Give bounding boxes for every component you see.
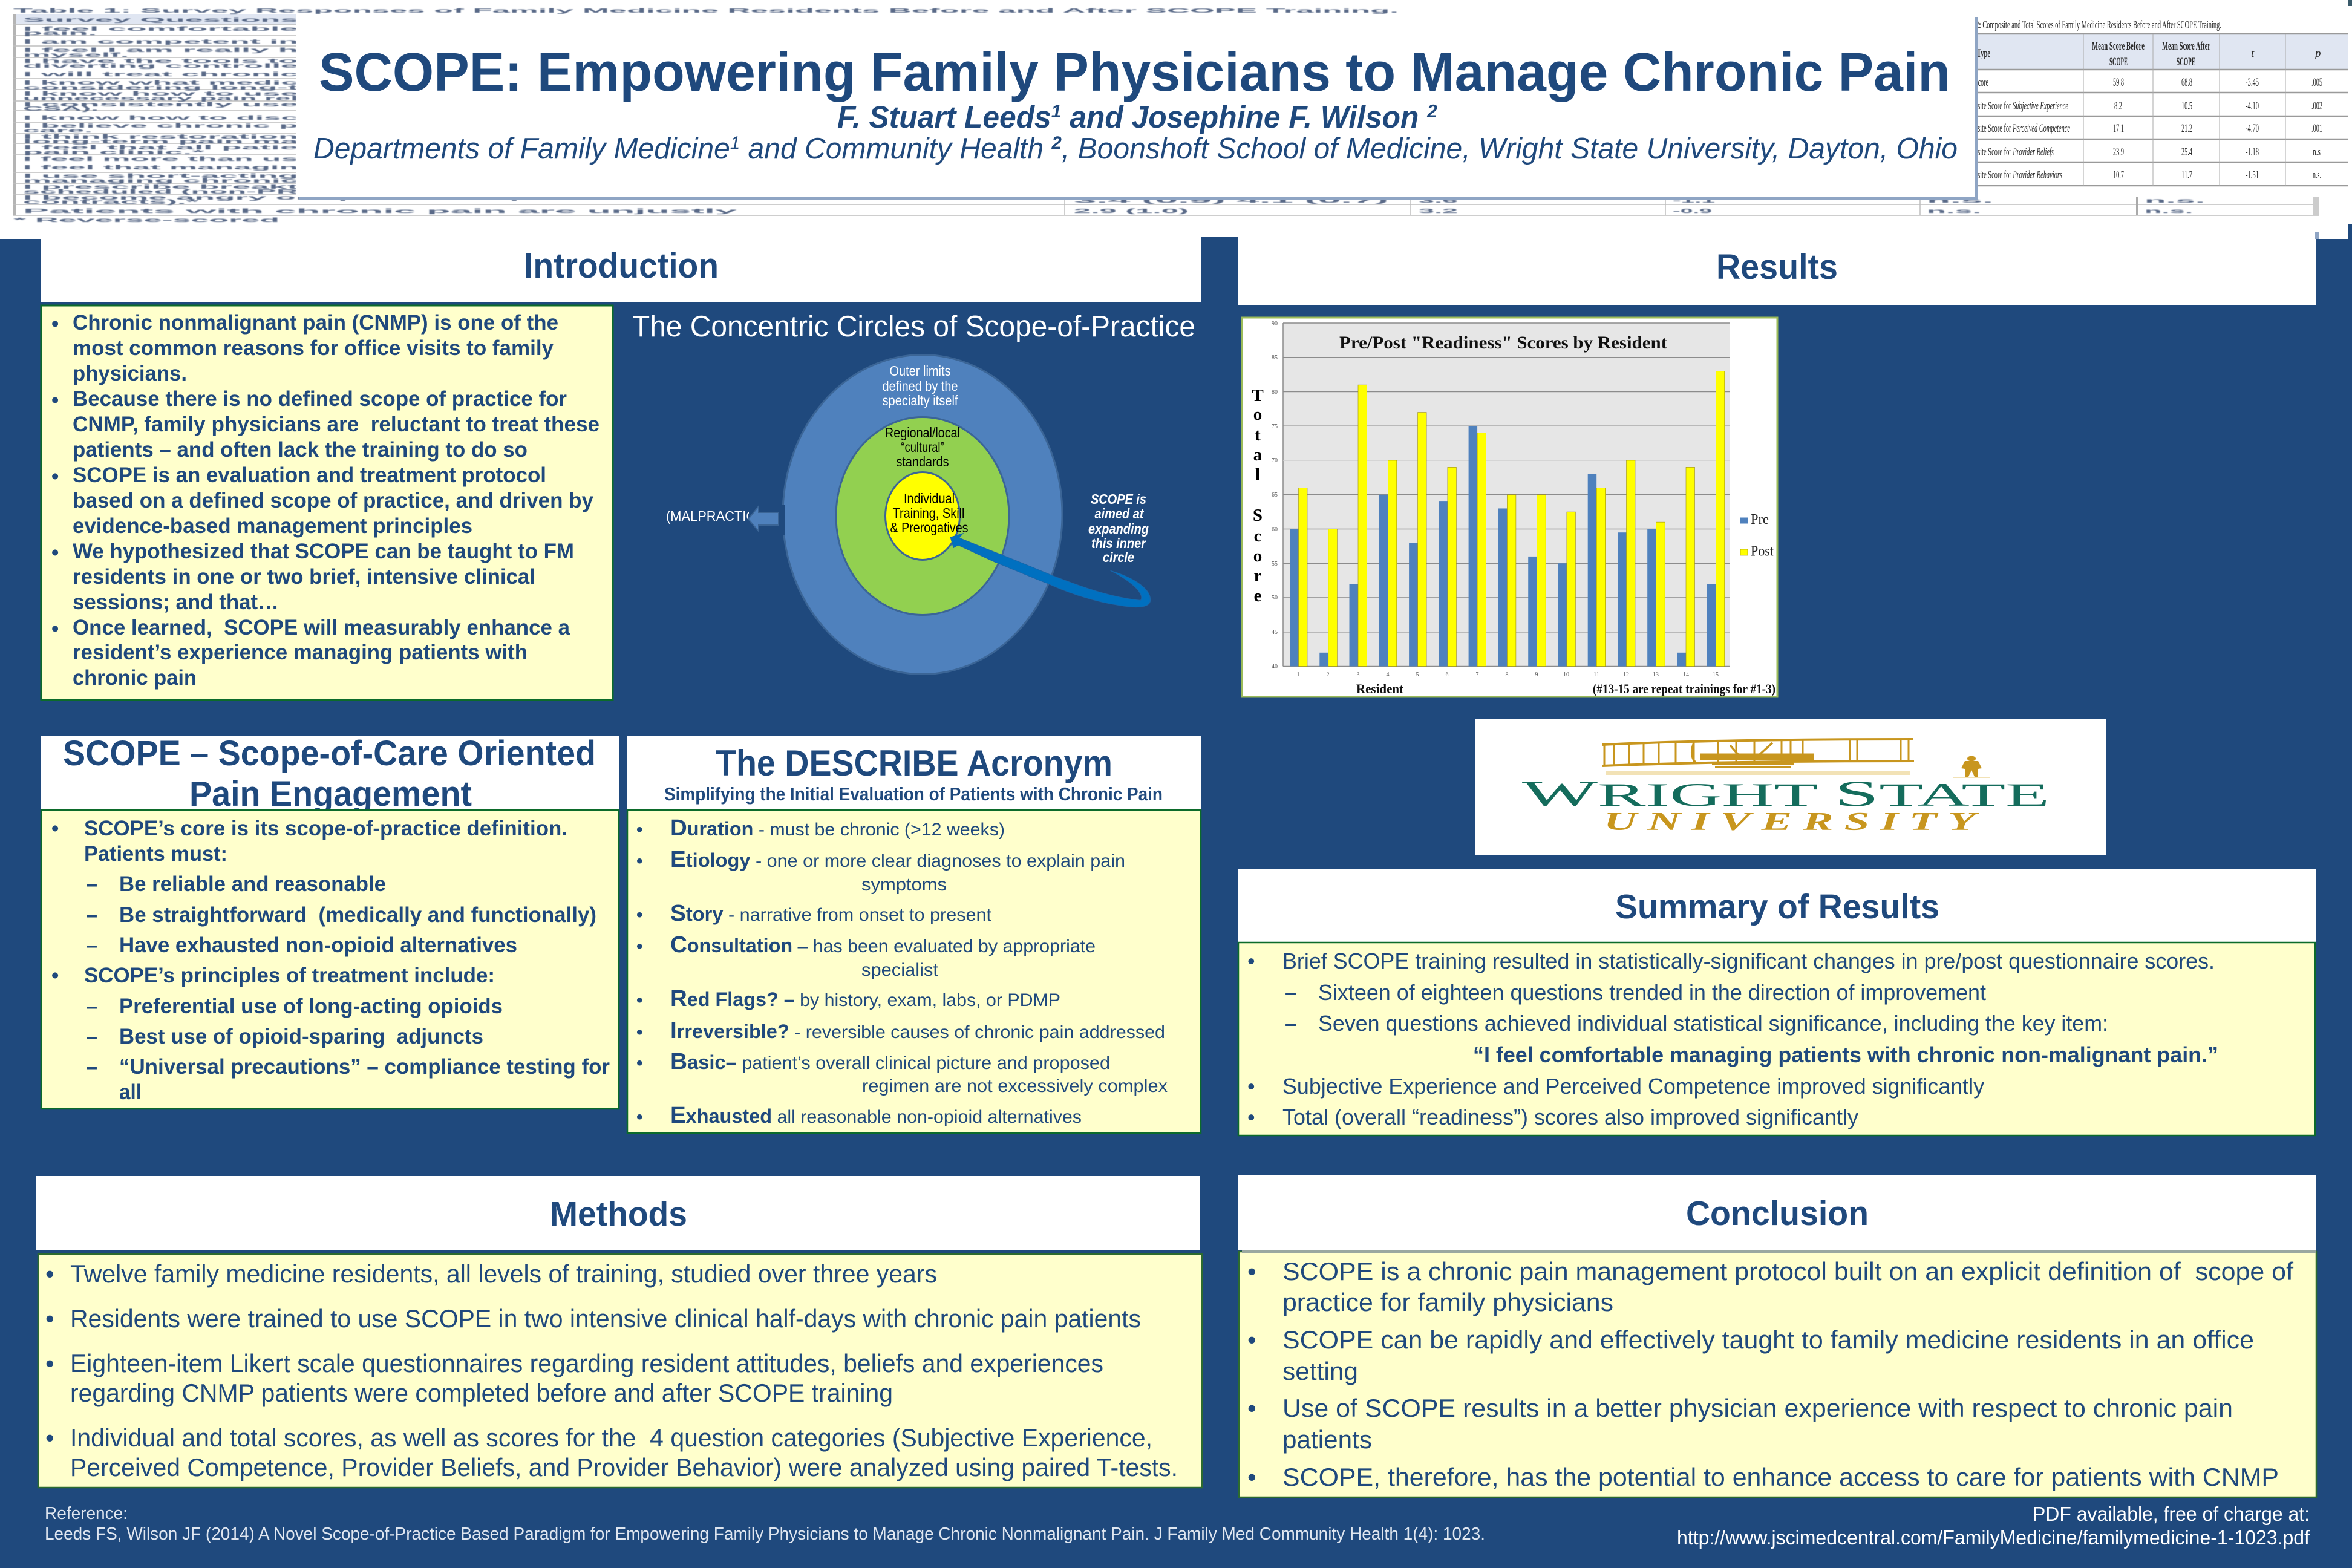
heading: Conclusion xyxy=(1238,1175,2316,1250)
introduction bullets xyxy=(41,305,613,700)
legend: Post xyxy=(1751,543,1774,559)
DESCRIBE list: • xyxy=(636,1107,643,1127)
outer circle: specialty itself xyxy=(882,393,958,408)
table 2 header row: p xyxy=(2314,47,2321,60)
background table 1: survey responses: 2.9 (1.0) xyxy=(1074,208,1189,215)
DESCRIBE list: Exhausted all reasonable non-opioid alternatives xyxy=(670,1103,1082,1128)
SCOPE bullets: • xyxy=(51,964,59,987)
panel: Introduction xyxy=(41,239,1201,700)
background table 1: survey responses: -1.1 xyxy=(1673,198,1716,204)
background table 1: survey responses: Survey Questions xyxy=(23,17,299,24)
title: SCOPE: Empowering Family Physicians to Manage Chronic Pain xyxy=(319,42,1950,103)
background table 1: survey responses: * Reverse-scored xyxy=(13,217,279,224)
SCOPE bullets: • xyxy=(51,817,59,840)
background table 1: survey responses: 3.2 xyxy=(1419,208,1459,215)
introduction bullets: Chronic nonmalignant pain (CNMP) is one of the xyxy=(73,311,558,335)
background table 1: survey responses: Table 1: Survey Responses of Family Medicine Residents Before and After SCOPE Training. xyxy=(13,8,1399,15)
SCOPE bullets: – xyxy=(86,872,97,896)
x axis scale: 11 xyxy=(1593,671,1599,678)
heading: DESCRIBE xyxy=(627,736,1201,809)
middle circle: Regional/local xyxy=(885,425,960,440)
summary bullets: Subjective Experience and Perceived Competence improved significantly xyxy=(1282,1074,1984,1099)
outer circle: defined by the xyxy=(882,378,958,394)
outer circle xyxy=(783,354,1062,674)
SCOPE bullets: Best use of opioid-sparing adjuncts xyxy=(119,1025,483,1048)
x axis scale: 5 xyxy=(1416,671,1419,678)
heading: Methods: Methods xyxy=(550,1195,687,1233)
background table 1: survey responses: 3.6 xyxy=(1419,198,1459,204)
DESCRIBE list: specialist xyxy=(861,960,939,980)
background table 1: survey responses: I consistently use xyxy=(23,102,299,108)
panel: Summary of Results xyxy=(1238,869,2316,1135)
background table 1: survey responses: Patients with chronic pain are unjustly xyxy=(23,208,739,215)
DESCRIBE list: Story - narrative from onset to present xyxy=(670,901,992,926)
y axis title: a xyxy=(1253,445,1263,465)
heading: SCOPE: Pain Engagement xyxy=(189,774,472,814)
DESCRIBE list: • xyxy=(636,1053,643,1073)
SCOPE callout: this inner xyxy=(1091,535,1146,551)
conclusion bullets: • xyxy=(1247,1394,1256,1422)
table 2 data rows xyxy=(1975,76,2322,181)
legend xyxy=(1740,512,1774,559)
diagram title: The Concentric Circles of Scope-of-Practice xyxy=(632,310,1195,343)
icon: Wright flyer xyxy=(1602,739,1914,767)
legend: Pre xyxy=(1751,512,1769,528)
footer: PDF link: PDF available, free of charge at: xyxy=(2033,1503,2310,1525)
background table 1: survey responses xyxy=(13,8,2319,224)
table 2 data rows: 25.4 xyxy=(2181,146,2192,158)
introduction bullets: residents in one or two brief, intensive clinical xyxy=(73,565,535,589)
DESCRIBE list: • xyxy=(636,1022,643,1042)
table 2 data rows: 17.1 xyxy=(2113,122,2124,135)
authors: and Josephine F. Wilson xyxy=(1062,100,1427,134)
conclusion bullets xyxy=(1239,1250,2316,1497)
summary bullets: • xyxy=(1247,1074,1255,1099)
x axis scale: 8 xyxy=(1505,671,1509,678)
DESCRIBE list: Red Flags? – by history, exam, labs, or PDMP xyxy=(670,986,1060,1011)
SCOPE callout: expanding xyxy=(1088,521,1149,537)
DESCRIBE list: Basic– patient’s overall clinical picture and proposed xyxy=(670,1049,1110,1074)
table 2 data rows: n.s xyxy=(2313,146,2321,158)
background table 1: survey responses: myself. xyxy=(23,52,129,59)
x axis scale: 3 xyxy=(1356,671,1360,678)
DESCRIBE list: • xyxy=(636,820,643,840)
middle circle xyxy=(836,417,1009,615)
summary bullets: “I feel comfortable managing patients with chronic non-malignant pain.” xyxy=(1473,1042,2218,1067)
conclusion bullets: SCOPE is a chronic pain management protocol built on an explicit definition of scope of xyxy=(1282,1257,2293,1285)
icon: standing figure xyxy=(1953,756,1990,778)
background table 2: composite and total scores xyxy=(1972,19,2348,186)
y axis title: r xyxy=(1254,566,1262,586)
introduction bullets: We hypothesized that SCOPE can be taught to FM xyxy=(73,540,574,563)
background table 1: survey responses: I think restoration xyxy=(23,134,298,140)
SCOPE bullets: Patients must: xyxy=(84,842,227,866)
table 2 data rows: 21.2 xyxy=(2181,122,2192,135)
authors: F. Stuart Leeds xyxy=(837,100,1057,134)
methods bullets xyxy=(38,1254,1202,1488)
DESCRIBE list: Duration - must be chronic (>12 weeks) xyxy=(670,815,1005,841)
panel: DESCRIBE acronym xyxy=(627,736,1201,1133)
conclusion bullets: SCOPE can be rapidly and effectively taught to family medicine residents in an office xyxy=(1282,1325,2254,1354)
summary bullets xyxy=(1238,942,2315,1135)
y axis scale: 40 xyxy=(1272,664,1278,670)
table 2 data rows: 59.8 xyxy=(2113,76,2124,89)
y axis scale: 65 xyxy=(1272,492,1278,498)
background table 1: survey responses: I prescribe breakt xyxy=(23,184,301,191)
table 2 data rows: -3.45 xyxy=(2246,76,2259,89)
curved arrow xyxy=(950,534,1150,607)
heading: SCOPE: SCOPE – Scope-of-Care Oriented xyxy=(63,734,596,773)
footer: PDF link xyxy=(1677,1503,2310,1549)
conclusion bullets: setting xyxy=(1282,1357,1358,1385)
methods bullets: • xyxy=(45,1259,54,1288)
DESCRIBE list: Consultation – has been evaluated by appropriate xyxy=(670,932,1096,958)
table 2 data rows: .002 xyxy=(2311,100,2322,113)
background table 1: survey responses: I become angry or upset when patients violate their contracts xyxy=(23,195,992,201)
SCOPE bullets: Preferential use of long-acting opioids xyxy=(119,995,503,1018)
introduction bullets: Because there is no defined scope of practice for xyxy=(73,387,567,411)
x axis scale: 1 xyxy=(1297,671,1299,678)
affiliations: Departments of Family Medicine xyxy=(313,132,739,165)
table 2 data rows: Score xyxy=(1975,76,1988,89)
SCOPE callout xyxy=(1088,491,1149,565)
SCOPE callout: circle xyxy=(1103,549,1134,565)
bar chart: pre/post readiness scores xyxy=(1242,318,1777,697)
y axis title: t xyxy=(1255,425,1261,445)
introduction bullets: chronic pain xyxy=(73,666,197,690)
introduction bullets: Once learned, SCOPE will measurably enhance a xyxy=(73,616,570,639)
x axis scale: 4 xyxy=(1387,671,1389,678)
background table 1: survey responses: CSA). xyxy=(23,106,99,113)
affiliations: 2 xyxy=(1051,133,1062,153)
conclusion bullets: • xyxy=(1247,1463,1256,1491)
heading: Summary of Results: Summary of Results xyxy=(1615,887,1939,926)
affiliations: and Community Health xyxy=(740,132,1052,165)
panel: Methods xyxy=(36,1176,1202,1488)
SCOPE bullets: – xyxy=(86,933,97,957)
summary bullets: – xyxy=(1285,1011,1297,1036)
y axis scale xyxy=(1272,321,1278,670)
background table 1: survey responses: pain. xyxy=(23,30,97,37)
table 2 header row: t xyxy=(2251,47,2255,60)
methods bullets: • xyxy=(45,1349,54,1377)
inner circle: Training, Skill xyxy=(893,505,964,521)
logo: Wright State University xyxy=(1475,719,2106,855)
conclusion bullets: patients xyxy=(1282,1425,1372,1454)
SCOPE bullets: – xyxy=(86,903,97,927)
introduction bullets: most common reasons for office visits to family xyxy=(73,336,554,360)
y axis scale: 85 xyxy=(1272,354,1278,361)
background table 1: survey responses: I know what medic xyxy=(23,80,299,87)
table 2 data rows: osite Score for Subjective Experience xyxy=(1975,100,2068,113)
background table 1: survey responses: care. xyxy=(23,128,93,134)
affiliations: 1 xyxy=(730,133,740,153)
background table 1: survey responses: pain clinic.* xyxy=(23,149,205,156)
heading: Results xyxy=(1238,239,2316,305)
background table 1: survey responses: diverting controlle xyxy=(23,63,299,70)
y axis scale: 70 xyxy=(1272,457,1278,464)
summary bullets: – xyxy=(1285,980,1297,1005)
background table 1: survey responses: n.s. xyxy=(1927,198,1994,204)
table 2 data rows: 68.8 xyxy=(2181,76,2192,89)
conclusion bullets: SCOPE, therefore, has the potential to enhance access to care for patients with CNMP xyxy=(1282,1463,2279,1491)
background table 1: survey responses: 3.4 (0.9) 4.1 (0.7) xyxy=(1074,198,1388,204)
DESCRIBE list xyxy=(627,810,1201,1133)
x axis title: Resident xyxy=(1356,681,1404,696)
background table 1: survey responses: I know how to disc xyxy=(23,115,299,122)
SCOPE callout: SCOPE is xyxy=(1091,491,1146,507)
DESCRIBE list: • xyxy=(636,936,643,956)
panel: Conclusion xyxy=(1238,1175,2316,1497)
x axis scale: 10 xyxy=(1563,671,1569,678)
heading: SCOPE xyxy=(41,734,619,814)
heading: Introduction xyxy=(41,239,1201,302)
table 2 data rows: -4.70 xyxy=(2246,122,2259,135)
background table 1: survey responses: I have the tools to xyxy=(23,58,298,65)
DESCRIBE list: regimen are not excessively complex xyxy=(862,1076,1168,1096)
DESCRIBE list: symptoms xyxy=(861,875,947,895)
background table 1: survey responses: managing chronic xyxy=(23,178,299,185)
summary bullets: • xyxy=(1247,949,1255,973)
SCOPE bullets: Have exhausted non-opioid alternatives xyxy=(119,933,517,957)
SCOPE bullets: SCOPE’s principles of treatment include: xyxy=(84,964,495,987)
table 2 data rows: .005 xyxy=(2311,76,2322,89)
methods bullets: • xyxy=(45,1304,54,1333)
table 2 data rows: .001 xyxy=(2311,122,2322,135)
SCOPE bullets: – xyxy=(86,1025,97,1048)
heading: Introduction: Introduction xyxy=(524,246,719,286)
x axis scale xyxy=(1297,671,1719,678)
table 2 data rows: osite Score for Provider Beliefs xyxy=(1975,146,2054,158)
methods bullets: Residents were trained to use SCOPE in two intensive clinical half-days with chronic pain patients xyxy=(70,1304,1141,1333)
y axis title: e xyxy=(1254,586,1262,606)
summary bullets: • xyxy=(1247,1105,1255,1129)
heading: DESCRIBE: Simplifying the Initial Evaluation of Patients with Chronic Pain xyxy=(664,783,1163,805)
background table 1: survey responses: I feel comfortable xyxy=(23,26,299,33)
methods bullets: Perceived Competence, Provider Beliefs, and Provider Behavior) were analyzed using paired T-tests. xyxy=(70,1453,1178,1481)
y axis title: S xyxy=(1253,506,1263,525)
x axis scale: 13 xyxy=(1653,671,1659,678)
background table 1: survey responses: n.s. xyxy=(2145,198,2206,204)
table 2 header row: Mean Score Before xyxy=(2092,40,2145,53)
introduction bullets: • xyxy=(51,312,59,336)
conclusion bullets: • xyxy=(1247,1325,1256,1354)
summary bullets: Brief SCOPE training resulted in statistically-significant changes in pre/post questionnaire scores. xyxy=(1282,949,2215,973)
x axis scale: 14 xyxy=(1683,671,1689,678)
inner circle: Individual xyxy=(904,491,955,506)
table 2 data rows: 23.9 xyxy=(2113,146,2124,158)
SCOPE callout: aimed at xyxy=(1095,506,1145,521)
footer: reference xyxy=(45,1504,1485,1544)
diagram: concentric circles of scope-of-practice xyxy=(632,310,1195,674)
DESCRIBE list: • xyxy=(636,990,643,1010)
icon: flyer ground shadow xyxy=(1606,771,1910,775)
DESCRIBE list: Etiology - one or more clear diagnoses to explain pain xyxy=(670,847,1125,872)
pre bars xyxy=(1290,426,1716,667)
background table 1: survey responses: long-term pain ma xyxy=(23,139,299,145)
inner circle xyxy=(886,472,968,560)
background table 1: survey responses: -0.9 xyxy=(1673,208,1713,215)
SCOPE bullets xyxy=(41,810,619,1109)
x axis scale: 9 xyxy=(1535,671,1538,678)
table 2 data rows: osite Score for Provider Behaviors xyxy=(1975,169,2062,181)
SCOPE bullets: “Universal precautions” – compliance testing for xyxy=(119,1055,610,1079)
y axis scale: 55 xyxy=(1272,561,1278,567)
introduction bullets: evidence-based management principles xyxy=(73,514,472,538)
introduction bullets: CNMP, family physicians are reluctant to treat these xyxy=(73,413,599,436)
summary bullets: Total (overall “readiness”) scores also improved significantly xyxy=(1282,1105,1858,1129)
introduction bullets: based on a defined scope of practice, and driven by xyxy=(73,489,594,512)
background table 1: survey responses: unnecessary pain rel xyxy=(23,96,299,102)
methods bullets: Eighteen-item Likert scale questionnaires regarding resident attitudes, beliefs and experiences xyxy=(70,1349,1103,1377)
footer: reference: Reference: xyxy=(45,1504,128,1523)
methods bullets: • xyxy=(45,1423,54,1452)
SCOPE bullets: – xyxy=(86,1055,97,1079)
y axis title: o xyxy=(1253,546,1262,566)
table 2 data rows: -4.10 xyxy=(2246,100,2259,113)
SCOPE bullets: SCOPE’s core is its scope-of-practice definition. xyxy=(84,817,567,840)
y axis scale: 75 xyxy=(1272,423,1278,430)
introduction bullets: sessions; and that… xyxy=(73,590,279,614)
chart title: Pre/Post "Readiness" Scores by Resident xyxy=(1339,333,1667,353)
SCOPE bullets: Be straightforward (medically and functionally) xyxy=(119,903,596,927)
y axis scale: 60 xyxy=(1272,526,1278,533)
malpractice label and arrow: (MALPRACTICE) xyxy=(666,508,769,524)
introduction bullets: patients – and often lack the training to do so xyxy=(73,438,528,462)
table 2 data rows: -1.18 xyxy=(2246,146,2259,158)
heading: Methods xyxy=(36,1176,1200,1250)
x axis scale: 6 xyxy=(1446,671,1448,678)
y axis scale: 90 xyxy=(1272,321,1278,327)
introduction bullets: • xyxy=(51,388,59,412)
methods bullets: Twelve family medicine residents, all levels of training, studied over three years xyxy=(70,1259,937,1288)
panel: SCOPE definition xyxy=(41,734,619,1109)
y axis title: o xyxy=(1253,405,1262,424)
methods bullets: regarding CNMP patients were completed before and after SCOPE training xyxy=(70,1379,893,1407)
y axis title: c xyxy=(1254,526,1262,546)
outer circle: Outer limits xyxy=(889,363,951,379)
table 2 header row xyxy=(1977,40,2321,68)
background table 1: survey responses: scheduled (non-PR xyxy=(23,189,301,195)
y axis scale: 45 xyxy=(1272,629,1278,636)
logo subline: UNIVERSITY xyxy=(1604,808,1987,836)
authors: 2 xyxy=(1426,100,1437,122)
background table 1: survey responses: I feel I am really h xyxy=(23,47,298,54)
DESCRIBE list: • xyxy=(636,851,643,871)
background table 1: survey responses: contracts).* xyxy=(23,199,199,206)
table 2 data rows: 10.7 xyxy=(2113,169,2124,181)
footer: PDF link: http://www.jscimedcentral.com/FamilyMedicine/familymedicine-1-1023.pdf xyxy=(1677,1526,2310,1549)
post bars xyxy=(1298,371,1725,667)
conclusion bullets: • xyxy=(1247,1257,1256,1285)
y axis scale: 50 xyxy=(1272,595,1278,601)
logo wordmark: W RIGHT S TATE xyxy=(1522,774,2050,814)
table 2 data rows: 8.2 xyxy=(2114,100,2122,113)
table 2 header row: Type xyxy=(1977,47,1990,60)
table 2 header row: SCOPE xyxy=(2109,56,2128,68)
summary bullets: Sixteen of eighteen questions trended in the direction of improvement xyxy=(1318,980,1986,1005)
authors: 1 xyxy=(1051,100,1062,122)
table 2 data rows: n.s. xyxy=(2313,169,2321,181)
introduction bullets: SCOPE is an evaluation and treatment protocol xyxy=(73,463,546,487)
malpractice label and arrow xyxy=(666,505,785,535)
background table 1: survey responses: I am competent in xyxy=(23,39,298,45)
background table 1: survey responses: I feel that all patie xyxy=(23,145,299,151)
title panel xyxy=(296,14,1978,200)
x axis scale: 15 xyxy=(1713,671,1719,678)
introduction bullets: physicians. xyxy=(73,362,187,385)
middle circle: “cultural” xyxy=(901,439,944,455)
middle circle: standards xyxy=(897,454,949,469)
introduction bullets: • xyxy=(51,465,59,488)
y axis title: l xyxy=(1255,465,1260,485)
table 2 data rows: 10.5 xyxy=(2181,100,2192,113)
heading: DESCRIBE: The DESCRIBE Acronym xyxy=(716,743,1112,783)
y axis scale: 80 xyxy=(1272,389,1278,396)
x axis scale: 7 xyxy=(1476,671,1478,678)
table 2 data rows: -1.51 xyxy=(2246,169,2259,181)
x axis scale: 2 xyxy=(1326,671,1330,678)
y axis title: T xyxy=(1252,386,1264,405)
table 2 header row: Mean Score After xyxy=(2162,40,2210,53)
introduction bullets: • xyxy=(51,617,59,641)
table 2 data rows: 11.7 xyxy=(2181,169,2192,181)
DESCRIBE list: • xyxy=(636,905,643,925)
table 2 data rows: osite Score for Perceived Competence xyxy=(1975,122,2070,135)
summary bullets: Seven questions achieved individual statistical significance, including the key item: xyxy=(1318,1011,2108,1036)
table 2 header row: SCOPE xyxy=(2177,56,2195,68)
DESCRIBE list: Irreversible? - reversible causes of chronic pain addressed xyxy=(670,1018,1165,1044)
inner circle: & Prerogatives xyxy=(890,520,968,535)
chart note: (#13-15 are repeat trainings for #1-3) xyxy=(1593,681,1775,696)
introduction bullets: resident’s experience managing patients with xyxy=(73,641,528,664)
background table 1: survey responses: I feel that managin xyxy=(23,165,298,171)
background table 1: survey responses: I believe chronic p xyxy=(23,123,298,129)
background table 1: survey responses: I know how to use xyxy=(23,91,299,97)
background table 1: survey responses: n.s. xyxy=(2145,208,2194,215)
footer: reference: Leeds FS, Wilson JF (2014) A Novel Scope-of-Practice Based Paradigm for Empowering Family Physicians to Manage Chronic Nonmalignant Pain. J Family Med Community Health 1(4): 1023. xyxy=(45,1524,1485,1544)
methods bullets: Individual and total scores, as well as scores for the 4 question categories (Subjective Experience, xyxy=(70,1423,1152,1452)
affiliations: , Boonshoft School of Medicine, Wright State University, Dayton, Ohio xyxy=(1062,132,1958,165)
x axis scale: 12 xyxy=(1623,671,1629,678)
conclusion bullets: Use of SCOPE results in a better physician experience with respect to chronic pain xyxy=(1282,1394,2233,1422)
SCOPE bullets: all xyxy=(119,1080,142,1104)
SCOPE bullets: Be reliable and reasonable xyxy=(119,872,386,896)
heading: Conclusion: Conclusion xyxy=(1686,1194,1869,1233)
background table 1: survey responses: considering long-t xyxy=(23,85,300,91)
heading: Summary of Results xyxy=(1238,869,2316,942)
conclusion bullets: practice for family physicians xyxy=(1282,1288,1613,1316)
background table 1: survey responses: I feel more than us xyxy=(23,156,299,163)
introduction bullets: • xyxy=(51,541,59,564)
background table 1: survey responses: n.s. xyxy=(1927,208,1982,215)
y axis title xyxy=(1252,386,1264,606)
background table 1: survey responses: I will treat chronic xyxy=(23,71,299,78)
heading: Results: Results xyxy=(1716,247,1838,287)
SCOPE bullets: – xyxy=(86,995,97,1018)
background table 1: survey responses: I use short-acting xyxy=(23,173,298,180)
panel: Results xyxy=(1238,239,2316,697)
